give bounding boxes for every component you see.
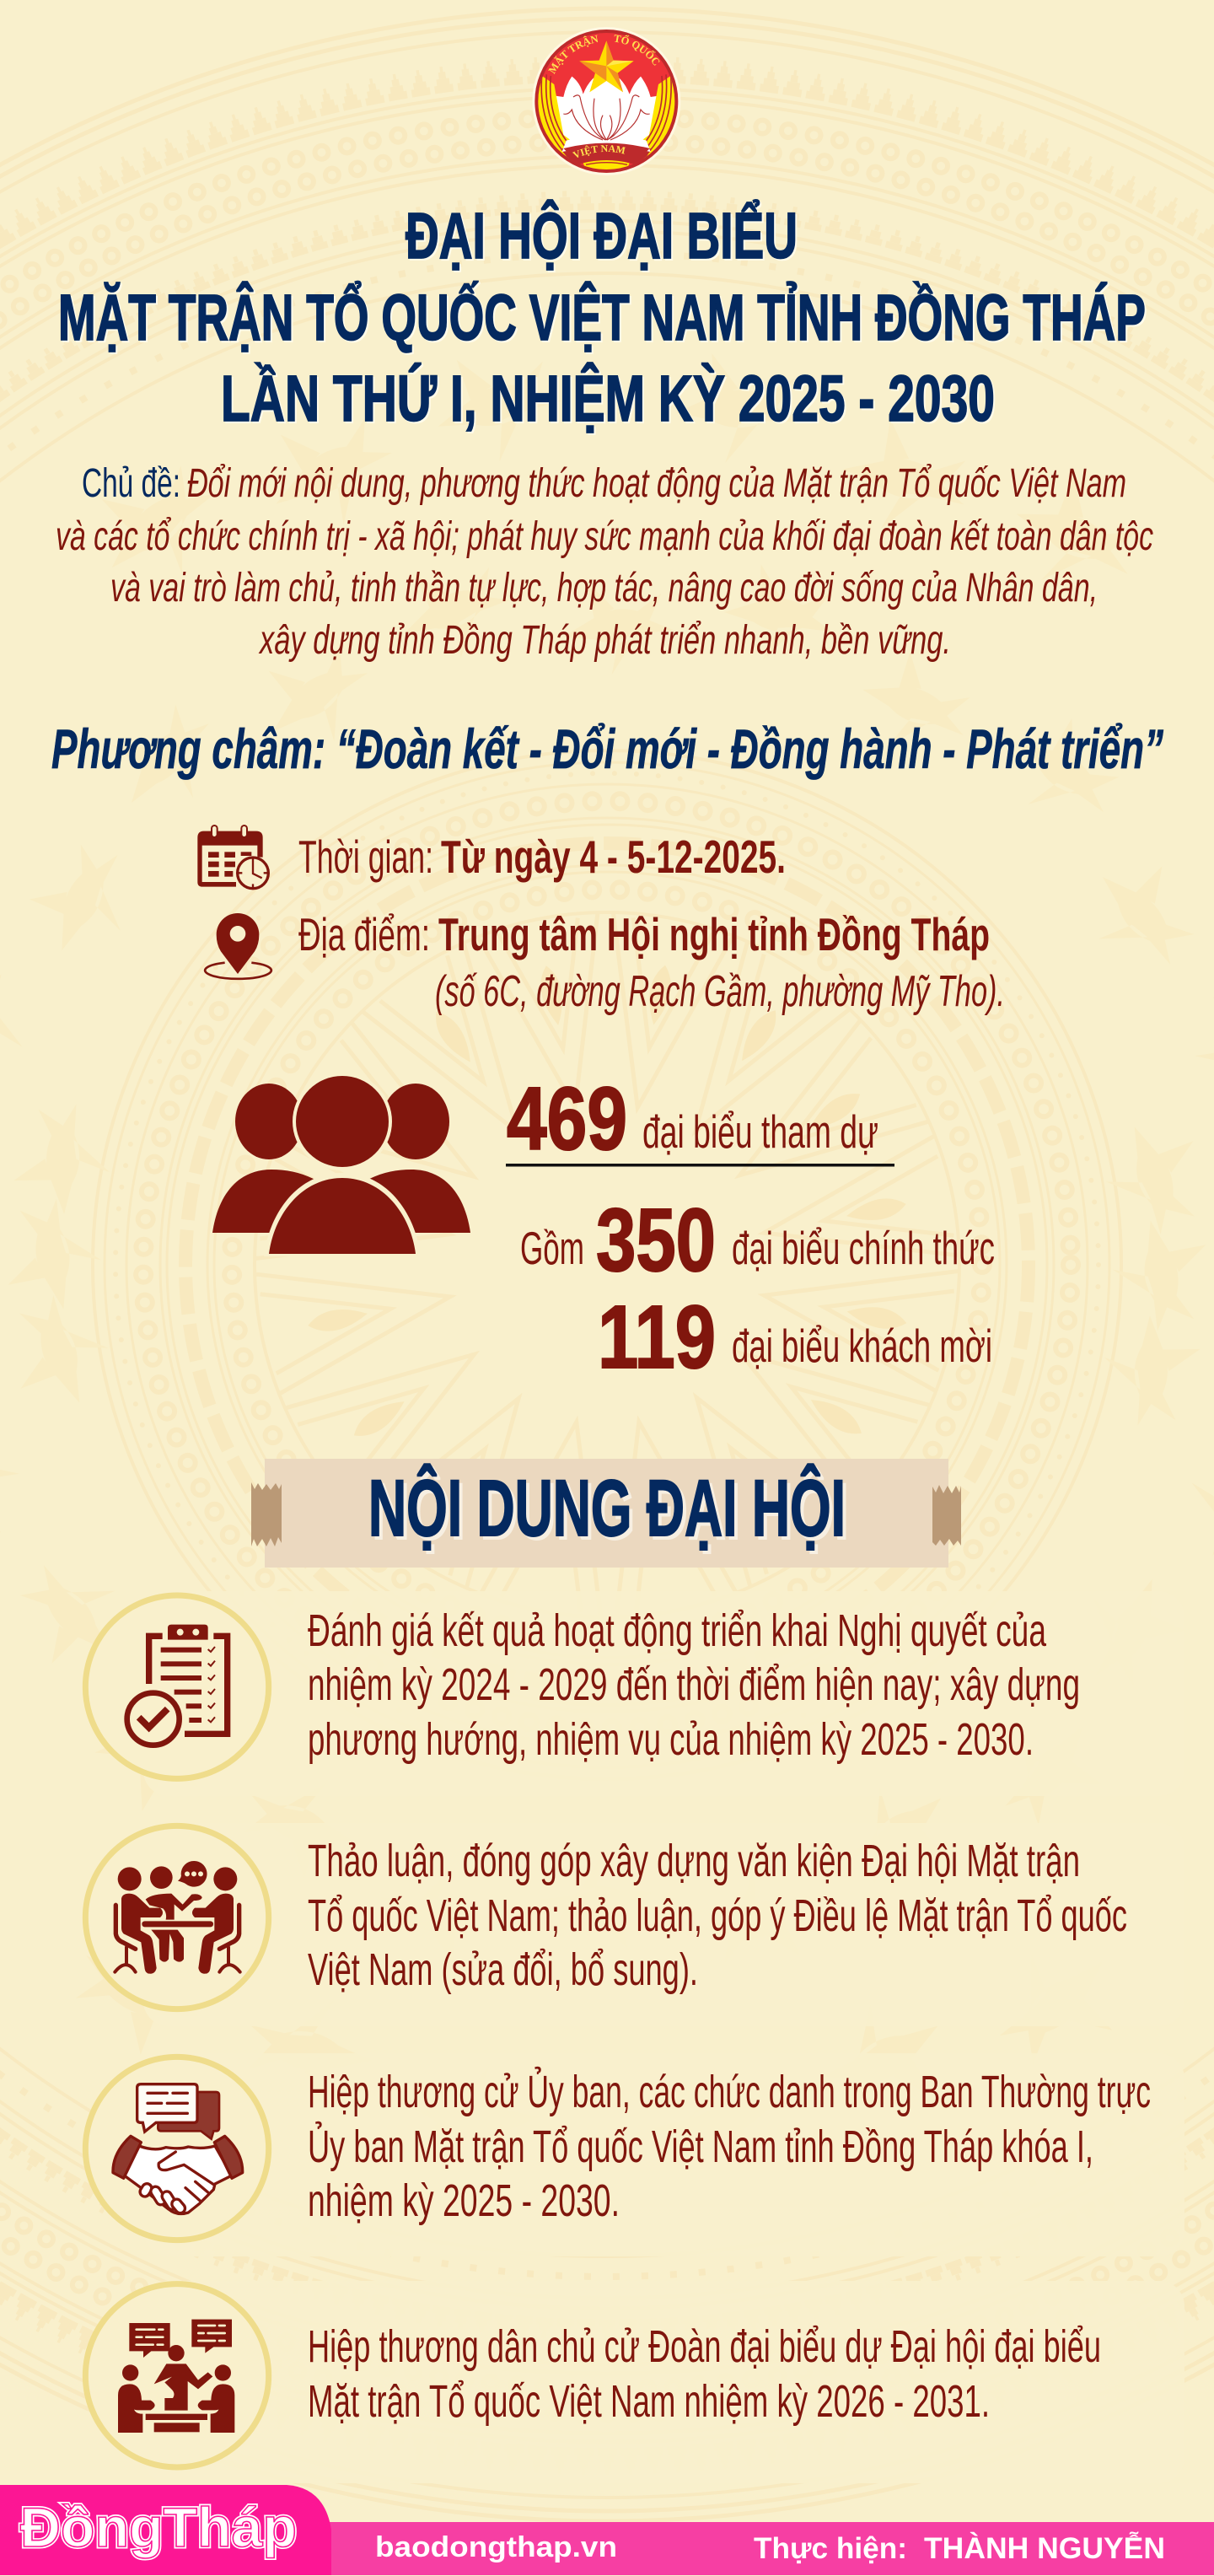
item 2: discussion xyxy=(85,1826,1127,2009)
stat: 350 official delegates: Gồm xyxy=(520,1222,584,1274)
website: baodongthap.vn xyxy=(375,2531,617,2563)
section heading banner: NỘI DUNG ĐẠI HỘI xyxy=(368,1464,846,1553)
icon: calendar and clock xyxy=(197,826,268,889)
section heading banner xyxy=(251,1459,961,1568)
stat: 119 guest delegates: đại biểu khách mời xyxy=(732,1320,992,1372)
stat: 469 delegates attending: đại biểu tham dự xyxy=(642,1105,878,1158)
time text: Từ ngày 4 - 5-12-2025. xyxy=(441,831,786,883)
icon: delegates group xyxy=(212,1073,470,1256)
stat: 350 official delegates xyxy=(520,1191,995,1290)
icon: presenter and audience with bubbles xyxy=(85,2284,269,2467)
stat: 350 official delegates: đại biểu chính thức xyxy=(732,1222,995,1274)
item 1 text xyxy=(308,1605,1080,1765)
credit: THÀNH NGUYỄN xyxy=(924,2531,1165,2565)
location text xyxy=(298,908,1005,1016)
item 3: consultation xyxy=(85,2057,1151,2240)
content panels veiling the pattern xyxy=(143,1591,1184,2483)
time text xyxy=(298,831,786,883)
stat: 469 delegates attending xyxy=(507,1069,878,1169)
stat: 119 guest delegates xyxy=(598,1288,992,1387)
logo block: ĐồngTháp xyxy=(20,2496,297,2558)
icon: location pin xyxy=(205,913,271,979)
icon: people at table xyxy=(85,1826,269,2009)
location text: Trung tâm Hội nghị tỉnh Đồng Tháp xyxy=(438,908,990,960)
emblem: Mặt trận Tổ quốc Việt Nam xyxy=(533,27,681,175)
emblem: Mặt trận Tổ quốc Việt Nam: MẶT TRẬN xyxy=(548,35,599,74)
item 3 text: nhiệm kỳ 2025 - 2030. xyxy=(308,2175,620,2226)
credit xyxy=(754,2531,1165,2565)
drum birds and animals xyxy=(0,347,1214,2183)
stat: 350 official delegates: 350 xyxy=(596,1191,716,1290)
theme text block: Chủ đề: xyxy=(82,461,180,506)
item 2 text xyxy=(308,1836,1127,1995)
item 1: evaluation xyxy=(85,1595,1080,1778)
stat: 469 delegates attending: 469 xyxy=(507,1069,627,1169)
divider under total xyxy=(506,1164,894,1167)
logo block: ĐồngTháp xyxy=(20,2496,297,2558)
time text: Thời gian: xyxy=(298,831,433,883)
credit: Thực hiện: xyxy=(754,2532,907,2565)
emblem: Mặt trận Tổ quốc Việt Nam: VIỆT NAM xyxy=(572,145,626,158)
item 4 text xyxy=(308,2321,1101,2427)
theme text block: xây dựng tỉnh Đồng Tháp phát triển nhanh, bền vững. xyxy=(259,618,951,663)
footer bar xyxy=(0,2485,1214,2575)
title xyxy=(58,199,1146,435)
item 4: delegation election xyxy=(85,2284,1101,2467)
stat: 119 guest delegates: 119 xyxy=(598,1288,716,1387)
drum star triangles xyxy=(256,914,958,1616)
icon: handshake with speech bubbles xyxy=(85,2057,269,2240)
emblem: Mặt trận Tổ quốc Việt Nam: TỔ QUỐC xyxy=(614,35,660,66)
title: ĐẠI HỘI ĐẠI BIỂU xyxy=(406,199,798,272)
logo block xyxy=(0,2485,331,2575)
location text: Địa điểm: xyxy=(298,908,430,960)
theme text block xyxy=(56,461,1153,663)
item 2 text: Việt Nam (sửa đổi, bổ sung). xyxy=(308,1944,698,1995)
item 3 text xyxy=(308,2067,1151,2226)
icon: clipboard checklist xyxy=(85,1595,269,1778)
